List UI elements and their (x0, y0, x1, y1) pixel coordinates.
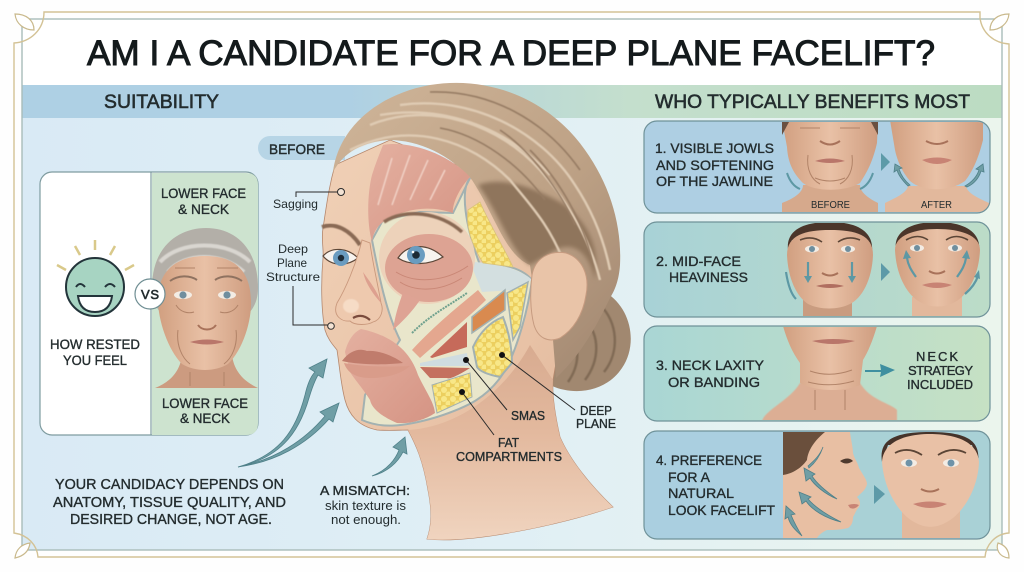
icon: smiling face with rays (57, 240, 134, 316)
badge: before: BEFORE (269, 141, 325, 157)
candidacy statement: DESIRED CHANGE, NOT AGE. (70, 511, 272, 528)
card text: 1. VISIBLE JOWLS (655, 140, 774, 156)
skin of head and neck (322, 140, 613, 540)
badge: VS: VS (141, 287, 159, 302)
candidacy statement: ANATOMY, TISSUE QUALITY, AND (53, 494, 286, 511)
heading: who typically benefits most: WHO TYPICALLY BENEFITS MOST (655, 92, 970, 113)
before face (782, 120, 878, 212)
callout: deep plane structure: Plane (277, 256, 307, 270)
callout: deep plane: PLANE (576, 416, 616, 431)
deep red muscle (430, 322, 467, 358)
after face (885, 120, 989, 212)
illustration: face anatomy (322, 83, 631, 540)
callout: deep plane (499, 352, 616, 431)
orbit ring and muscle (379, 212, 475, 304)
ear (531, 252, 587, 340)
callout: deep plane structure (266, 242, 334, 329)
label: lower face and neck (bottom) (162, 395, 248, 426)
arrow: jowl down right (860, 173, 873, 189)
silver SMAS sheet (470, 262, 532, 292)
label: lower face and neck (bottom): LOWER FACE (162, 395, 248, 411)
card text: LOOK FACELIFT (668, 502, 775, 518)
forehead muscle (368, 144, 470, 242)
label: neck strategy included: NECK (916, 349, 958, 364)
profile face (783, 432, 867, 538)
card 3: neck laxity (644, 326, 990, 421)
arrow: candidacy to upper face (238, 359, 327, 467)
card 2: mid-face heaviness (644, 222, 990, 317)
label: lower face and neck (top): LOWER FACE (161, 185, 246, 201)
label: neck strategy included: STRATEGY (908, 363, 973, 378)
label: lower face and neck (bottom): & NECK (180, 410, 231, 426)
after face: AFTER (921, 200, 952, 211)
nerve line (412, 293, 467, 333)
fat temple (467, 202, 513, 267)
card text: 3. NECK LAXITY (656, 357, 765, 373)
label: neck strategy included: INCLUDED (907, 377, 973, 392)
callout: fat compartments: COMPARTMENTS (456, 449, 562, 464)
text: a mismatch note: A MISMATCH: (320, 483, 410, 498)
lips (342, 350, 410, 378)
callout: sagging (273, 188, 344, 211)
panel: how rested vs lower face comparison (40, 172, 258, 435)
card 1: visible jowls (644, 120, 990, 213)
callout: deep plane structure: Structure (266, 270, 320, 284)
callout: fat compartments (456, 389, 562, 464)
arrows: sagging downward (786, 262, 856, 299)
badge: VS (135, 279, 165, 309)
portrait: older woman (152, 228, 258, 388)
candidacy statement (53, 476, 286, 528)
arrow: mismatch to chin (372, 437, 407, 476)
arrow: before to after (881, 263, 890, 281)
front face (882, 432, 979, 539)
bun (545, 292, 631, 391)
anatomy: exposed facial layers (362, 144, 532, 426)
title: AM I A CANDIDATE FOR A DEEP PLANE FACELIFT? (87, 34, 935, 73)
callout: sagging: Sagging (273, 197, 318, 211)
label: neck strategy included (907, 349, 973, 392)
after face (895, 222, 980, 317)
callout: deep plane structure: Deep (278, 242, 308, 256)
callout: fat compartments: FAT (498, 435, 519, 450)
hair (333, 83, 620, 378)
neck image (762, 326, 897, 421)
card text: 4. PREFERENCE (656, 452, 762, 468)
card text (656, 253, 748, 285)
text: a mismatch note: skin texture is (325, 498, 406, 513)
nose (336, 240, 382, 324)
card text: OR BANDING (668, 374, 760, 390)
badge: before (258, 136, 345, 160)
arrow: to neck strategy (865, 364, 895, 377)
label: how rested you feel: YOU FEEL (63, 352, 127, 368)
card text (656, 357, 765, 390)
card text: AND SOFTENING (656, 157, 774, 173)
label: lower face and neck (top) (161, 185, 246, 217)
before face (787, 222, 873, 317)
orange fascia (472, 290, 505, 333)
arrow: candidacy to jaw (238, 403, 339, 467)
arrows: lifting upward (903, 250, 980, 294)
arrow: jowl down left (787, 173, 800, 189)
card 4: natural look (644, 431, 990, 539)
text: a mismatch note (320, 483, 410, 527)
heading: suitability: SUITABILITY (104, 92, 219, 113)
zygomatic muscle (412, 290, 486, 358)
pale fascia base (362, 178, 532, 426)
cheek levator muscle (393, 293, 420, 330)
arrow: before to after (874, 485, 885, 504)
arrow: lift right (965, 164, 984, 187)
near eye (398, 247, 443, 264)
neck shading (408, 345, 613, 540)
label: how rested you feel: HOW RESTED (50, 336, 140, 352)
label: how rested you feel (50, 336, 140, 368)
fat jaw pad (432, 373, 472, 413)
callout: SMAS: SMAS (511, 408, 545, 423)
far side eye and brow (322, 226, 360, 266)
card text (655, 140, 774, 189)
fat cheek pad (473, 317, 512, 377)
callout: SMAS (463, 357, 545, 423)
arrows: lift lines (785, 447, 841, 536)
label: lower face and neck (top): & NECK (178, 201, 230, 217)
fat upper cheek (507, 282, 528, 340)
card text: OF THE JAWLINE (656, 173, 773, 189)
card text: FOR A (668, 469, 711, 485)
callout: deep plane: DEEP (580, 403, 612, 418)
card text: 2. MID-FACE (656, 253, 741, 269)
card text (656, 452, 775, 518)
mouth muscle (345, 329, 435, 423)
text: a mismatch note: not enough. (331, 512, 401, 527)
card text: NATURAL (668, 485, 734, 501)
before face: BEFORE (811, 200, 850, 211)
silver band (420, 353, 469, 366)
arrow: before to after (881, 153, 890, 171)
card text: HEAVINESS (669, 269, 748, 285)
arrow: lift left (894, 164, 910, 186)
candidacy statement: YOUR CANDIDACY DEPENDS ON (55, 476, 284, 493)
